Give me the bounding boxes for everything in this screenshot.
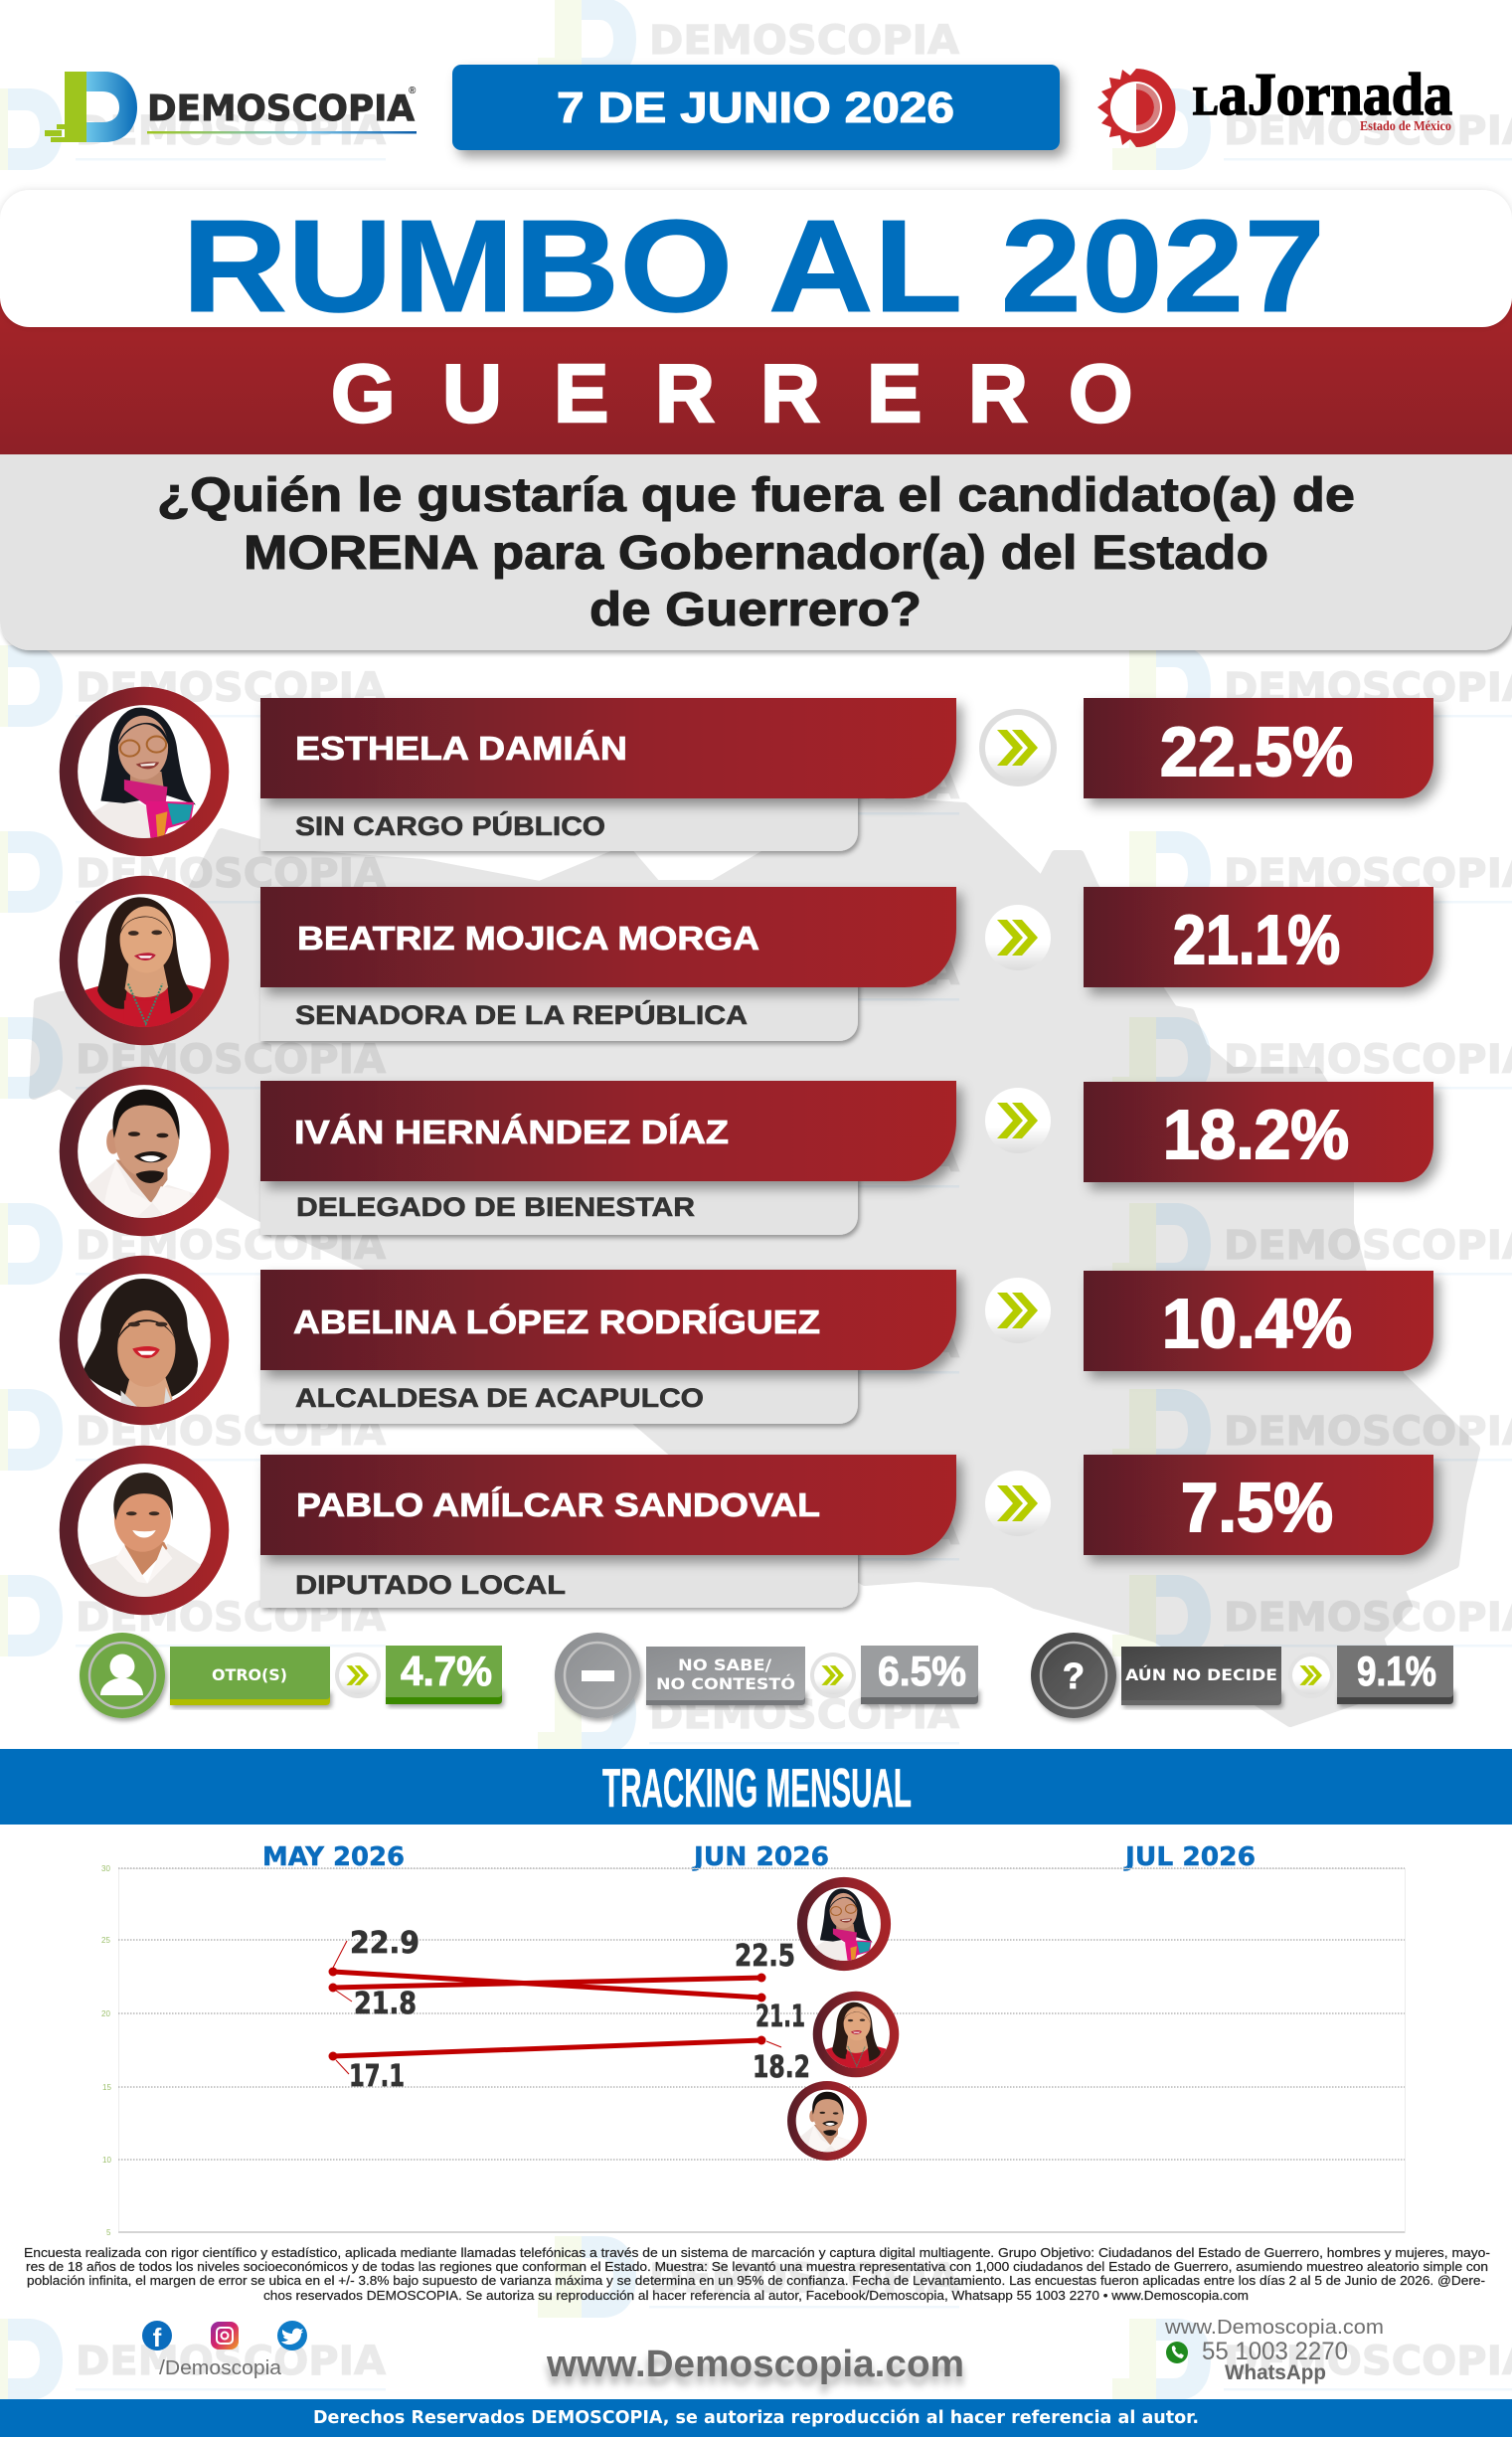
row: Iván Hernández Díaz <box>69 1076 1433 1235</box>
watermarks: DEMOSCOPIA <box>649 1508 959 1554</box>
contact block: 55 1003 2270 <box>1202 2338 1348 2365</box>
white title card <box>0 190 1512 327</box>
leader lines <box>333 1941 781 2074</box>
month labels: MAY 2026 <box>262 1842 405 1872</box>
footer bar: Derechos Reservados DEMOSCOPIA, se autoriza reproducción al hacer referencia al autor. <box>313 2407 1199 2428</box>
row: Abelina López Rodríguez <box>69 1265 1433 1424</box>
row: Pablo Amílcar Sandoval: DIPUTADO LOCAL <box>295 1570 566 1600</box>
value labels: 22.5 <box>735 1939 795 1974</box>
month labels: JUN 2026 <box>692 1842 829 1872</box>
heading bar: tracking mensual <box>0 1749 1512 1825</box>
methodology text: población infinita, el margen de error se ubica en el +/- 3.8% bajo supuesto de varianza máxima y se determina en un 95% de confianza. Fecha de Levantamiento. Las encuestas fueron aplicadas entre los días 2 al 5 de Junio de 2026. @Dere- <box>27 2273 1485 2288</box>
panel: title <box>0 190 1512 650</box>
row: Esthela Damián: SIN CARGO PÚBLICO <box>295 810 605 841</box>
state name: GUERRERO <box>331 347 1133 439</box>
item: Otro(s): OTRO(S) <box>212 1665 287 1684</box>
red band <box>0 298 1512 454</box>
row: Abelina López Rodríguez: ABELINA LÓPEZ RODRÍGUEZ <box>293 1304 820 1340</box>
row: Abelina López Rodríguez: ALCALDESA DE ACAPULCO <box>295 1383 704 1413</box>
question panel <box>0 454 1512 650</box>
watermarks: DEMOSCOPIA <box>76 665 386 711</box>
social icons: f <box>153 2323 162 2352</box>
row: Iván Hernández Díaz: 18.2% <box>1163 1096 1349 1173</box>
website centre: www.Demoscopia.com <box>546 2344 964 2385</box>
contact block: WhatsApp <box>1225 2361 1326 2384</box>
row: Iván Hernández Díaz: IVÁN HERNÁNDEZ DÍAZ <box>294 1114 729 1150</box>
row: Beatriz Mojica Morga: BEATRIZ MOJICA MORGA <box>297 920 759 957</box>
item: No sabe / No contestó: NO SABE/ <box>678 1655 771 1674</box>
footer bar <box>0 2399 1512 2437</box>
row: Pablo Amílcar Sandoval <box>69 1455 1433 1608</box>
watermarks: DEMOSCOPIA <box>649 763 959 808</box>
contact block <box>1164 2317 1384 2384</box>
watermarks: DEMOSCOPIA <box>649 949 959 994</box>
chart frame and grid: 15 <box>102 2083 111 2092</box>
watermarks: DEMOSCOPIA <box>76 108 386 154</box>
value labels: 22.9 <box>350 1926 420 1961</box>
methodology text <box>24 2245 1490 2303</box>
chart portraits <box>791 1882 895 2157</box>
watermarks: DEMOSCOPIA <box>76 851 386 897</box>
question text: MORENA para Gobernador(a) del Estado <box>244 527 1268 580</box>
logo: La Jornada: Estado de México <box>1360 119 1451 134</box>
value labels: 18.2 <box>753 2050 810 2085</box>
item: Aún no decide: 9.1% <box>1357 1648 1436 1694</box>
item: No sabe / No contestó: 6.5% <box>878 1648 966 1694</box>
chart frame and grid: 10 <box>102 2156 111 2165</box>
value labels <box>349 1926 810 2094</box>
logo: Demoscopia <box>45 72 417 142</box>
item: No sabe / No contestó <box>555 1633 978 1718</box>
row: Pablo Amílcar Sandoval: PABLO AMÍLCAR SANDOVAL <box>296 1486 820 1523</box>
watermarks: DEMOSCOPIA <box>76 1037 386 1083</box>
row: Abelina López Rodríguez: 10.4% <box>1162 1285 1352 1362</box>
logo: Demoscopia: DEMOSCOPIA <box>147 88 415 129</box>
question text <box>157 469 1355 636</box>
month labels: JUL 2026 <box>1123 1842 1256 1872</box>
row: Beatriz Mojica Morga: 21.1% <box>1173 901 1340 978</box>
logo: La Jornada: LaJornada <box>1193 62 1452 127</box>
watermarks: DEMOSCOPIA <box>649 18 959 64</box>
row: Beatriz Mojica Morga <box>69 885 1433 1041</box>
website centre: www.Demoscopia.com <box>546 2351 964 2393</box>
chart frame and grid: 30 <box>101 1864 110 1873</box>
row: Esthela Damián: ESTHELA DAMIÁN <box>295 730 627 767</box>
trend lines <box>328 1967 765 2060</box>
logo: La Jornada <box>1097 62 1452 147</box>
logo: Demoscopia: ® <box>409 86 417 96</box>
title text: RUMBO AL 2027 <box>182 193 1325 339</box>
heading bar: tracking mensual: TRACKING MENSUAL <box>602 1757 912 1819</box>
item: Aún no decide: ? <box>1063 1655 1085 1696</box>
question text: de Guerrero? <box>589 584 922 636</box>
item: Otro(s) <box>80 1633 502 1718</box>
row: Pablo Amílcar Sandoval: 7.5% <box>1181 1469 1333 1546</box>
value labels: 21.1 <box>756 2000 805 2034</box>
chart frame and grid: 5 <box>106 2228 111 2237</box>
chart frame and grid: 20 <box>101 2009 110 2018</box>
watermarks: DEMOSCOPIA <box>649 2256 959 2302</box>
methodology text: chos reservados DEMOSCOPIA. Se autoriza su reproducción al hacer referencia al autor, Facebook/Demoscopia, Whatsapp 55 1003 2270 • www.Demoscopia.com <box>263 2288 1249 2303</box>
chart frame and grid <box>101 1864 1406 2237</box>
methodology text: Encuesta realizada con rigor científico y estadístico, aplicada mediante llamadas telefónicas a través de un sistema de marcación y captura digital multiagente. Grupo Objetivo: Ciudadanos del Estado de Guerrero, hombres y mujeres, mayo- <box>24 2245 1490 2260</box>
item: Aún no decide <box>1031 1633 1453 1718</box>
item: No sabe / No contestó: NO CONTESTÓ <box>656 1674 795 1693</box>
month labels <box>262 1842 1256 1872</box>
value labels: 21.8 <box>354 1987 417 2021</box>
row: Esthela Damián: 22.5% <box>1160 713 1353 790</box>
watermarks: DEMOSCOPIA <box>76 1223 386 1269</box>
chart frame and grid: 25 <box>101 1936 110 1945</box>
watermarks: DEMOSCOPIA <box>76 1595 386 1641</box>
item: Aún no decide: AÚN NO DECIDE <box>1125 1665 1277 1684</box>
watermarks: DEMOSCOPIA <box>76 1409 386 1455</box>
item: Otro(s): 4.7% <box>401 1648 492 1694</box>
value labels: 17.1 <box>349 2059 405 2094</box>
watermarks: DEMOSCOPIA <box>649 1135 959 1181</box>
contact block: www.Demoscopia.com <box>1164 2317 1384 2339</box>
watermarks: DEMOSCOPIA <box>649 1321 959 1367</box>
watermarks: DEMOSCOPIA <box>76 2339 386 2384</box>
map silhouette of Guerrero <box>34 800 1475 1722</box>
row: Beatriz Mojica Morga: SENADORA DE LA REPÚBLICA <box>295 999 748 1030</box>
social icons <box>142 2321 307 2379</box>
date pill <box>452 65 1060 150</box>
social icons: /Demoscopia <box>159 2357 282 2379</box>
row: Iván Hernández Díaz: DELEGADO DE BIENESTAR <box>296 1192 695 1222</box>
panel: tracking chart <box>0 1749 1512 2237</box>
date pill: 7 DE JUNIO 2026 <box>557 84 954 132</box>
watermarks: DEMOSCOPIA <box>649 1692 959 1738</box>
question text: ¿Quién le gustaría que fuera el candidato(a) de <box>157 469 1355 522</box>
methodology text: res de 18 años de todos los niveles socioeconómicos y de todas las regiones que conforman el Estado. Muestra: Se levantó una muestra representativa con 1,000 ciudadanos del Estado de Guerrero, asumiendo muestreo aleatorio simple con <box>26 2259 1488 2274</box>
row: Esthela Damián <box>69 696 1433 851</box>
